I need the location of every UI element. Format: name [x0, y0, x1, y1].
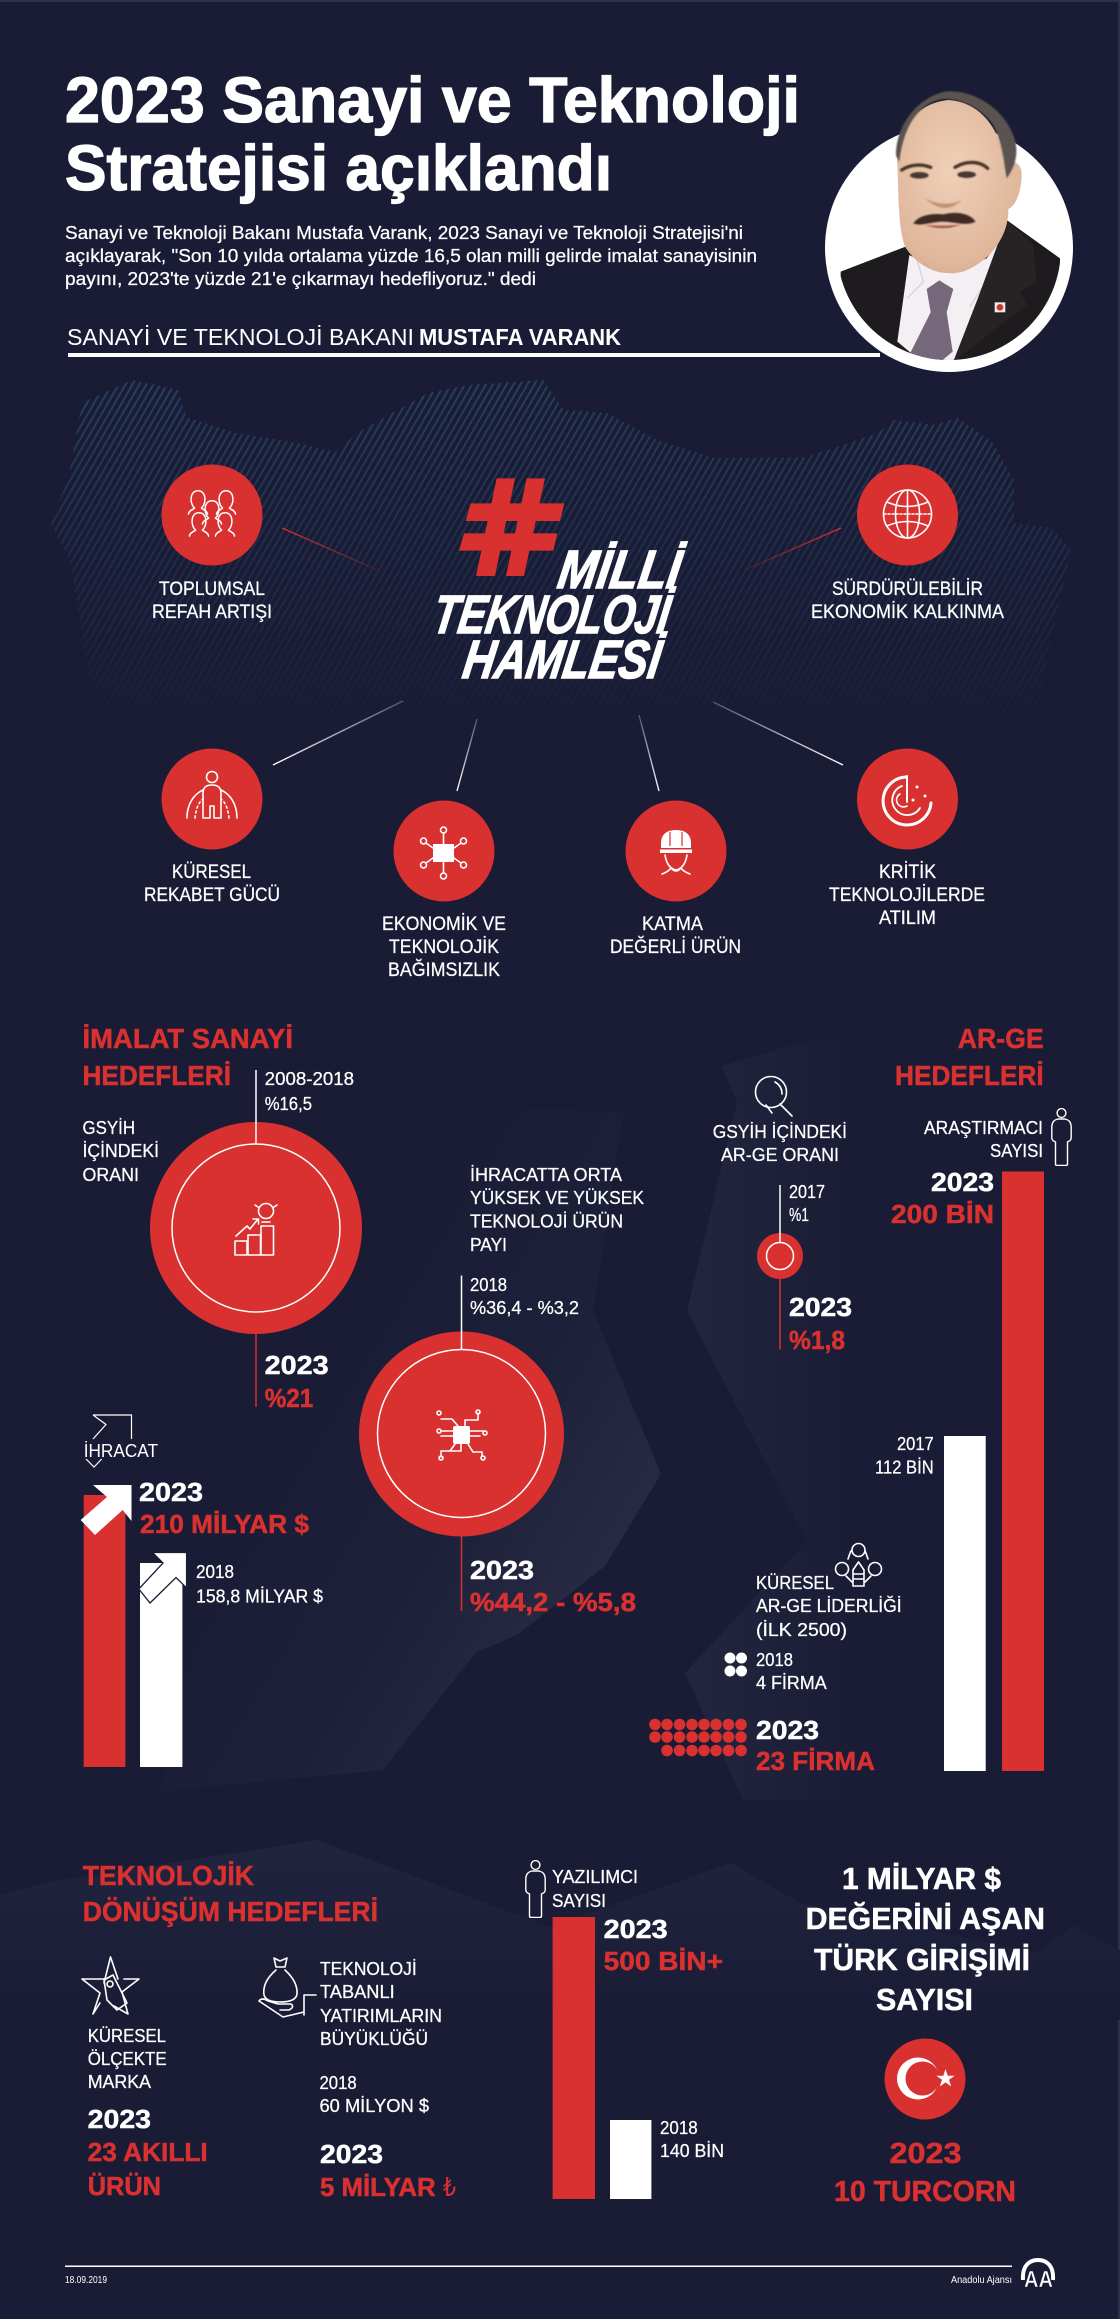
export bar 2018 [139, 1552, 187, 1767]
R&D share of GDP label: GSYİH İÇİNDEKİ [713, 1122, 847, 1142]
investment value 2023 [320, 2139, 456, 2202]
global brand value 2023 [88, 2104, 208, 2201]
export value 2018 [196, 1562, 323, 1606]
investment value 2018: 2018 [320, 2072, 357, 2093]
value 2008-2018: %16,5 [265, 1094, 312, 1114]
high-tech export value 2023: %44,2 - %5,8 [470, 1587, 636, 1617]
minister caption: MUSTAFA VARANK [419, 324, 621, 350]
goal: critical technologies [829, 748, 985, 929]
global brand label: KÜRESEL [88, 2025, 166, 2046]
label [610, 914, 741, 958]
software developers label: SAYISI [552, 1890, 606, 1911]
value 2008-2018 [265, 1069, 354, 1114]
heading [82, 1023, 293, 1091]
researchers bar 2017 [944, 1436, 986, 1771]
GDP share circle chart [150, 1070, 362, 1407]
icon: researcher person [1052, 1109, 1071, 1165]
developers value 2023: 500 BİN+ [604, 1946, 723, 1976]
technology investment label: BÜYÜKLÜĞÜ [320, 2028, 428, 2049]
global R&D leadership label [756, 1573, 902, 1640]
title: Stratejisi açıklandı [65, 132, 612, 204]
footer [65, 2260, 1053, 2292]
icon: growth bars with bulb [235, 1204, 277, 1255]
label: EKONOMİK VE [382, 914, 506, 935]
label: TEKNOLOJİK [389, 937, 499, 958]
goal: value-added products [610, 800, 741, 958]
investment value 2018 [320, 2072, 429, 2116]
firms value 2018 [756, 1650, 827, 1693]
unicorn value 2023: 2023 [890, 2138, 962, 2170]
export value 2023: 210 MİLYAR $ [140, 1509, 310, 1539]
label: ATILIM [879, 908, 936, 929]
minister caption [67, 324, 880, 357]
export bar 2023 [81, 1485, 132, 1767]
developers value 2018: 140 BİN [660, 2140, 724, 2161]
heading: TEKNOLOJİK [83, 1860, 254, 1891]
firms value 2018: 4 FİRMA [756, 1673, 827, 1693]
title: 2023 Sanayi ve Teknoloji [65, 64, 800, 136]
GDP share label [82, 1118, 159, 1185]
R&D share of GDP label [713, 1122, 847, 1165]
global brand value 2023: 2023 [88, 2104, 151, 2134]
high-tech export label [470, 1165, 644, 1255]
goal: global competitiveness [144, 748, 280, 906]
researchers label [924, 1118, 1043, 1161]
label: DEĞERLİ ÜRÜN [610, 936, 741, 958]
label [829, 862, 985, 929]
heading: AR-GE [958, 1023, 1044, 1054]
minister portrait [825, 91, 1073, 378]
developers bar 2023 [553, 1917, 595, 2199]
icon: globe [884, 490, 932, 538]
investment value 2018: 60 MİLYON $ [320, 2095, 429, 2116]
heading: HEDEFLERİ [895, 1060, 1044, 1091]
hash symbol [459, 478, 564, 576]
label [811, 579, 1004, 623]
export value 2018: 2018 [196, 1562, 234, 1582]
icon: hard hat worker [660, 830, 692, 874]
export heading: İHRACAT [84, 1441, 158, 1461]
export value 2023: 2023 [139, 1477, 203, 1507]
global brand label [88, 2025, 167, 2092]
unicorn value 2023: 10 TURCORN [834, 2176, 1016, 2208]
label: SÜRDÜRÜLEBİLİR [832, 579, 983, 600]
heading [83, 1860, 378, 1927]
icon: people group [188, 491, 236, 536]
high-tech export value 2018: %36,4 - %3,2 [470, 1298, 579, 1318]
icon: person with wings [187, 772, 237, 818]
label: BAĞIMSIZLIK [388, 959, 500, 981]
high-tech export value 2018 [470, 1275, 579, 1318]
icon: microchip [437, 1410, 487, 1460]
researchers label: ARAŞTIRMACI [924, 1118, 1043, 1138]
unicorn heading: 1 MİLYAR $ [842, 1861, 1001, 1896]
global brand label: MARKA [88, 2071, 152, 2092]
icon: magnifier [756, 1076, 792, 1116]
header [65, 64, 1073, 378]
intro paragraph: açıklayarak, "Son 10 yılda ortalama yüzde 16,5 olan milli gelirde imalat sanayisinin [65, 246, 757, 266]
dots: 4 firms [724, 1652, 747, 1676]
logo wordmark [429, 539, 688, 690]
background shape: manufacturing region [161, 1005, 661, 1791]
R&D share circle chart [757, 1185, 803, 1350]
technology investment label: TABANLI [320, 1981, 395, 2002]
unicorn heading: TÜRK GİRİŞİMİ [814, 1942, 1030, 1977]
technology investment label: TEKNOLOJİ [320, 1958, 417, 1979]
global R&D leadership label: KÜRESEL [756, 1573, 834, 1593]
export value 2023 [139, 1477, 310, 1539]
R&D share of GDP label: AR-GE ORANI [721, 1145, 839, 1165]
high-tech export value 2018: 2018 [470, 1275, 507, 1295]
title [65, 64, 800, 204]
label: REFAH ARTIŞI [152, 602, 272, 623]
high-tech export label: TEKNOLOJİ ÜRÜN [470, 1212, 623, 1232]
label [382, 914, 506, 981]
icon: network box [420, 827, 466, 879]
goal: economic and technological independence [382, 800, 506, 981]
goal: social welfare [152, 464, 272, 623]
technology investment label: YATIRIMLARIN [320, 2005, 442, 2026]
researchers label: SAYISI [990, 1141, 1043, 1161]
researchers value 2017: 2017 [897, 1434, 934, 1454]
logo wordmark: MİLLİ [554, 539, 688, 600]
intro paragraph: Sanayi ve Teknoloji Bakanı Mustafa Varank, 2023 Sanayi ve Teknoloji Stratejisi'ni [65, 223, 743, 243]
panel: R&D targets [649, 1023, 1071, 1776]
export value 2018: 158,8 MİLYAR $ [196, 1586, 323, 1606]
dots: 23 firms [649, 1719, 747, 1756]
unicorn value 2023 [834, 2138, 1016, 2208]
investment value 2023: 2023 [320, 2139, 383, 2169]
global brand label: ÖLÇEKTE [88, 2048, 167, 2069]
value 2023 [265, 1350, 329, 1413]
researchers value 2023: 200 BİN [891, 1199, 994, 1229]
R&D share value 2017: 2017 [789, 1182, 825, 1202]
icon: Anadolu Agency logo: AA [1024, 2266, 1053, 2292]
unicorn heading [806, 1861, 1045, 2017]
label: REKABET GÜCÜ [144, 885, 280, 906]
GDP share label: GSYİH [82, 1118, 135, 1138]
developers value 2018: 2018 [660, 2117, 698, 2138]
R&D share value 2023: 2023 [789, 1292, 852, 1322]
value 2023: %21 [265, 1383, 313, 1413]
connector lines [273, 528, 843, 791]
value 2023: 2023 [265, 1350, 329, 1380]
label: TOPLUMSAL [159, 579, 265, 600]
background shape: R&D region [685, 1038, 900, 1800]
unicorn heading: DEĞERİNİ AŞAN [806, 1901, 1045, 1936]
icon: radar [883, 776, 931, 825]
goal: sustainable development [811, 464, 1004, 623]
unicorn heading: SAYISI [876, 1982, 973, 2017]
global brand value 2023: ÜRÜN [88, 2171, 161, 2201]
researchers value 2017: 112 BİN [875, 1458, 934, 1478]
high-tech export value 2023 [470, 1555, 636, 1617]
global R&D leadership label: (İLK 2500) [756, 1620, 847, 1640]
GDP share label: İÇİNDEKİ [82, 1141, 159, 1161]
software developers label: YAZILIMCI [552, 1866, 638, 1887]
high-tech export circle chart [359, 1276, 564, 1611]
high-tech export label: İHRACATTA ORTA [470, 1165, 622, 1185]
icon: Turkish flag circle [884, 2038, 966, 2120]
investment value 2023: 5 MİLYAR [320, 2172, 436, 2202]
intro paragraph: payını, 2023'te yüzde 21'e çıkarmayı hedefliyoruz." dedi [65, 269, 536, 289]
researchers value 2023: 2023 [931, 1167, 994, 1197]
background shape: mountains behind lower section [0, 1840, 1120, 2020]
high-tech export label: YÜKSEK VE YÜKSEK [470, 1188, 644, 1208]
investment value 2023: ₺ [443, 2172, 456, 2202]
icon: money bag on hand [259, 1958, 316, 2017]
global brand value 2023: 23 AKILLI [88, 2137, 208, 2167]
label: KATMA [642, 914, 703, 935]
firms value 2023: 23 FİRMA [756, 1746, 875, 1776]
developers value 2023 [604, 1914, 723, 1976]
panel: manufacturing targets [81, 1023, 644, 1767]
global R&D leadership label: AR-GE LİDERLİĞİ [756, 1595, 902, 1616]
heading: İMALAT SANAYİ [82, 1023, 293, 1054]
logo wordmark: TEKNOLOJİ [429, 584, 677, 645]
software developers label [552, 1866, 638, 1911]
icon: developer person [526, 1861, 545, 1917]
label: EKONOMİK KALKINMA [811, 602, 1004, 623]
high-tech export value 2023: 2023 [470, 1555, 534, 1585]
developers bar 2018 [610, 2120, 651, 2199]
minister caption: SANAYİ VE TEKNOLOJİ BAKANI [67, 324, 414, 350]
panel: technological transformation targets [82, 1860, 1045, 2208]
intro paragraph [65, 223, 757, 289]
firms value 2023: 2023 [756, 1715, 819, 1745]
high-tech export label: PAYI [470, 1235, 507, 1255]
R&D share value 2017: %1 [789, 1205, 809, 1225]
R&D share value 2017 [789, 1182, 825, 1225]
researchers value 2017 [875, 1434, 934, 1478]
logo wordmark: HAMLESİ [459, 629, 668, 690]
date: 18.09.2019 [65, 2274, 107, 2286]
label [144, 862, 280, 906]
developers value 2023: 2023 [604, 1914, 668, 1944]
heading [895, 1023, 1044, 1091]
heading: DÖNÜŞÜM HEDEFLERİ [83, 1896, 378, 1927]
label: KÜRESEL [172, 862, 251, 883]
icon: star with tag [82, 1957, 139, 2014]
heading: HEDEFLERİ [82, 1060, 231, 1091]
export heading [84, 1415, 158, 1467]
GDP share label: ORANI [82, 1165, 139, 1185]
firms value 2018: 2018 [756, 1650, 793, 1670]
firms value 2023 [756, 1715, 875, 1776]
researchers value 2023 [891, 1167, 994, 1229]
R&D share value 2023: %1,8 [789, 1325, 845, 1355]
icon: global companies [836, 1544, 882, 1586]
researchers bar 2023 [1002, 1172, 1044, 1771]
label: KRİTİK [879, 862, 936, 883]
technology investment label [320, 1958, 442, 2049]
label [152, 579, 272, 623]
developers value 2018 [660, 2117, 724, 2161]
map of Turkey, hatched background [50, 380, 1070, 656]
value 2008-2018: 2008-2018 [265, 1069, 354, 1089]
R&D share value 2023 [789, 1292, 852, 1355]
central logo: Milli Teknoloji Hamlesi [429, 478, 688, 690]
label: TEKNOLOJİLERDE [829, 885, 985, 906]
agency name: Anadolu Ajansı [951, 2274, 1012, 2286]
